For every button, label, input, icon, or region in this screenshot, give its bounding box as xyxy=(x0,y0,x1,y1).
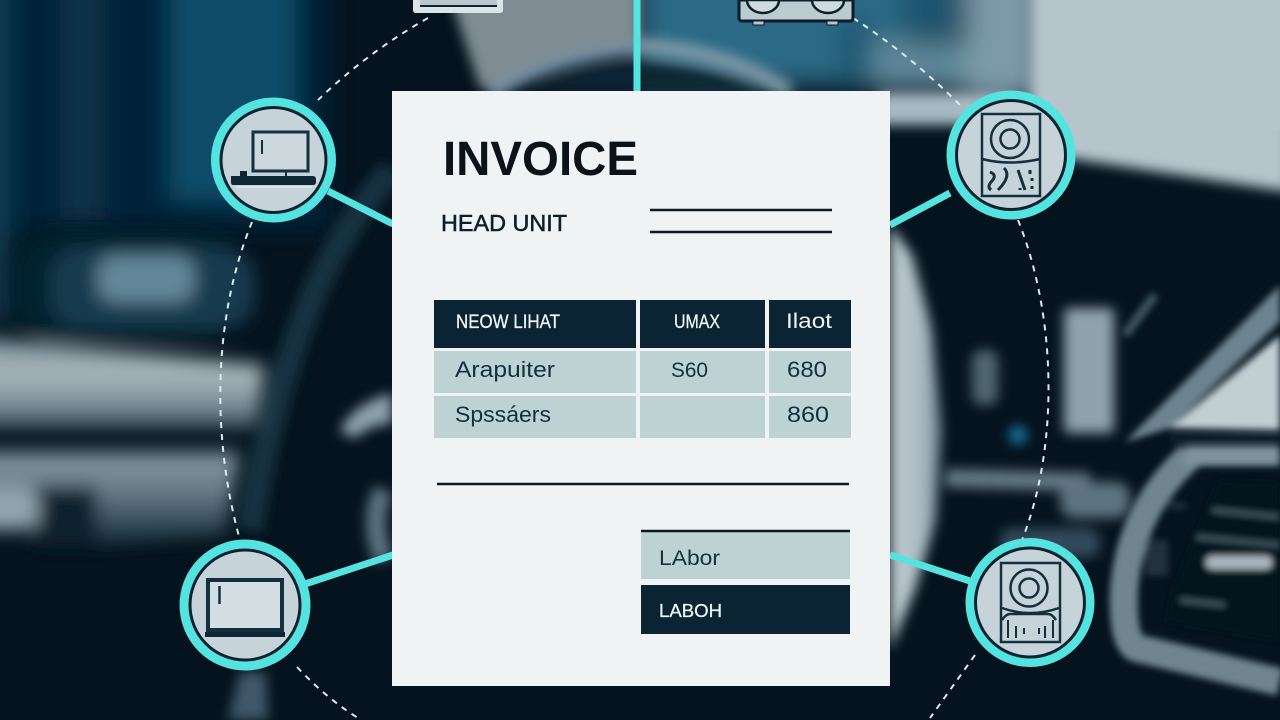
row: amplifier: Arapuiter xyxy=(455,357,555,382)
row: speakers: Spssáers xyxy=(455,402,551,427)
icon badge: amplifier xyxy=(951,95,1071,215)
table header row xyxy=(434,300,851,348)
labor row light xyxy=(641,531,850,579)
vent opening xyxy=(1165,480,1280,642)
row: amplifier: S60 xyxy=(671,359,708,382)
connector: lower right xyxy=(890,555,970,581)
row: speakers xyxy=(434,396,851,438)
table header row: Ilaot xyxy=(786,310,832,333)
table header row: UMAX xyxy=(674,312,720,333)
upper right light area xyxy=(1030,0,1280,192)
icon badge: laptop xyxy=(184,544,306,666)
connector: upper left xyxy=(328,191,393,224)
connector: top xyxy=(634,0,640,92)
icon badge: speaker xyxy=(970,542,1090,662)
icon: cropped head unit at top left xyxy=(413,0,503,13)
table header row: NEOW LIHAT xyxy=(456,312,560,333)
labor row light: LAbor xyxy=(659,547,720,570)
line item table xyxy=(434,300,851,438)
left wheel rim xyxy=(250,170,392,530)
icon: cropped amplifier at top right xyxy=(739,0,853,25)
dash band xyxy=(0,335,265,428)
row: amplifier xyxy=(434,351,851,393)
mirror xyxy=(14,232,240,340)
head unit label with fill-in lines: HEAD UNIT xyxy=(441,210,567,236)
hub highlights xyxy=(340,393,392,438)
labor row dark xyxy=(641,585,850,634)
totals divider xyxy=(437,483,849,485)
upper right solid light area xyxy=(1070,0,1280,130)
dashed orbit around the invoice xyxy=(220,18,1049,718)
a-pillar and windscreen xyxy=(1125,285,1280,442)
connector: lower left xyxy=(305,555,393,584)
invoice panel xyxy=(392,91,890,686)
row: amplifier: 680 xyxy=(787,357,827,382)
vent frame xyxy=(1124,456,1280,682)
icon badge: head unit xyxy=(216,102,332,218)
cluster xyxy=(972,350,998,405)
upper wheel and roof xyxy=(445,0,640,88)
right wheel rim xyxy=(890,225,942,650)
labor row dark: LABOH xyxy=(659,601,722,621)
invoice title: INVOICE xyxy=(443,133,638,186)
row: speakers: 860 xyxy=(787,402,829,427)
connector: upper right xyxy=(890,193,950,225)
